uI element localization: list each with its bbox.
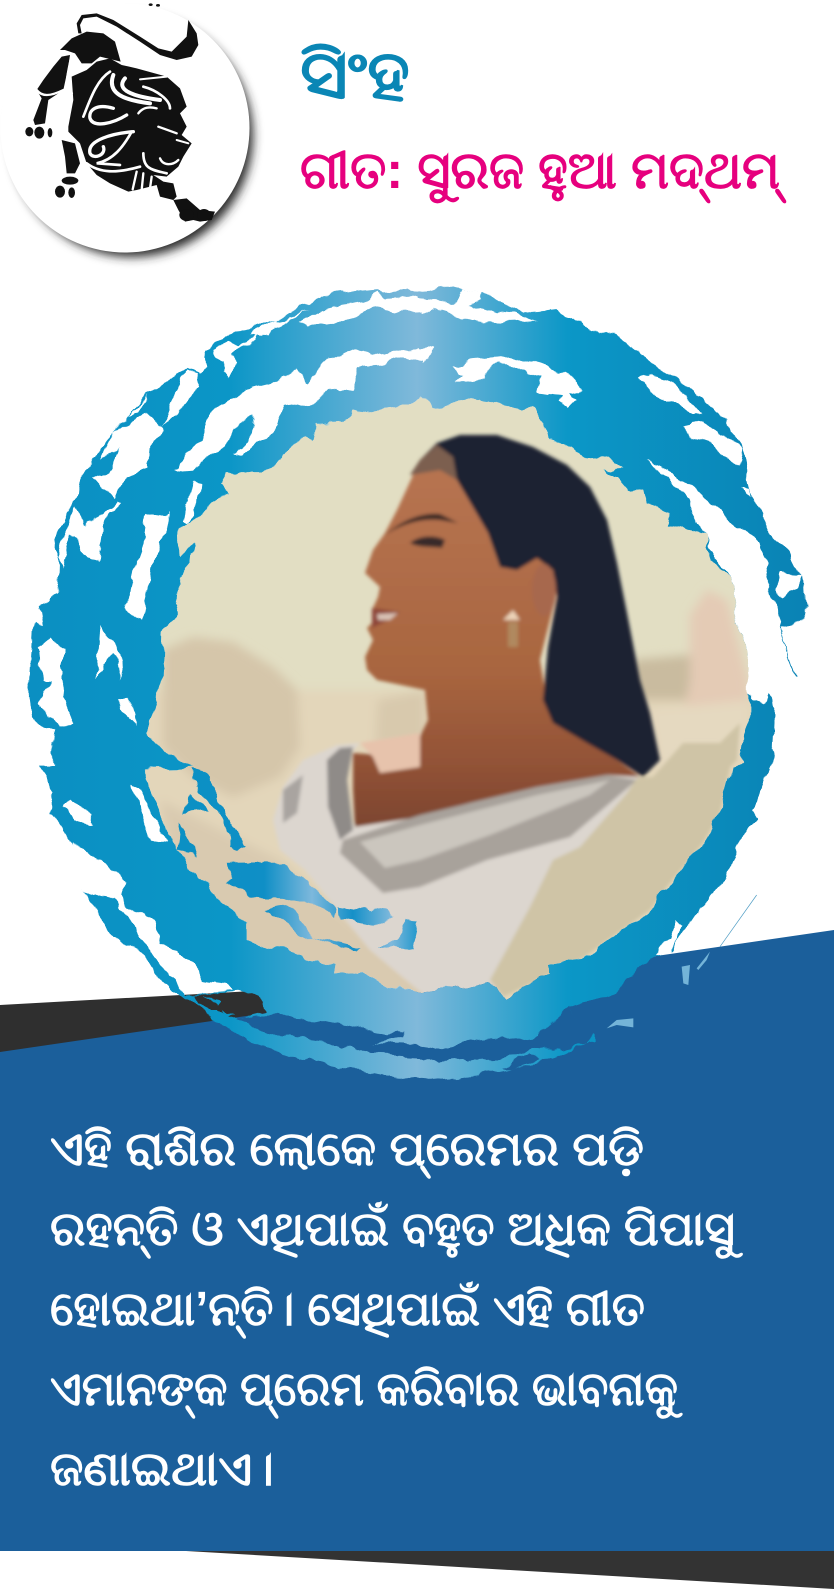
zodiac badge: lion in white disc — [0, 3, 253, 257]
blue text panel — [0, 930, 834, 1551]
disc shadow — [11, 15, 253, 257]
body text: ହୋଇଥା’ନ୍ତି। ସେଥିପାଇଁ ଏହି ଗୀତ — [50, 1280, 645, 1339]
ribbons over the photo — [176, 767, 418, 952]
body text: ରହନ୍ତି ଓ ଏଥିପାଇଁ ବହୁତ ଅଧିକ ପିପାସୁ — [50, 1200, 744, 1259]
heading: zodiac sign: ସିଂହ — [300, 37, 410, 113]
body text: ଏହି ରାଶିର ଲୋକେ ପ୍ରେମର ପଡ଼ି — [50, 1123, 644, 1179]
white disc — [0, 4, 250, 252]
photo: woman in profile — [140, 380, 760, 1020]
small brush flecks on panel — [607, 895, 757, 1028]
brush ring — [27, 286, 809, 1080]
body text — [50, 1123, 744, 1496]
body text: ଜଣାଇଥାଏ। — [50, 1443, 274, 1496]
bottom dark strip — [186, 1551, 834, 1589]
body text: ଏମାନଙ୍କ ପ୍ରେମ କରିବାର ଭାବନାକୁ — [50, 1363, 684, 1419]
photo background: desert and rocks — [140, 590, 760, 1020]
heading: song title: ଗୀତ: ସୁରଜ ହୁଆ ମଦ୍‌ଥମ୍ — [300, 142, 786, 203]
woman figure — [273, 435, 740, 1000]
lion emblem — [25, 3, 215, 222]
top-left dark band — [0, 990, 270, 1053]
